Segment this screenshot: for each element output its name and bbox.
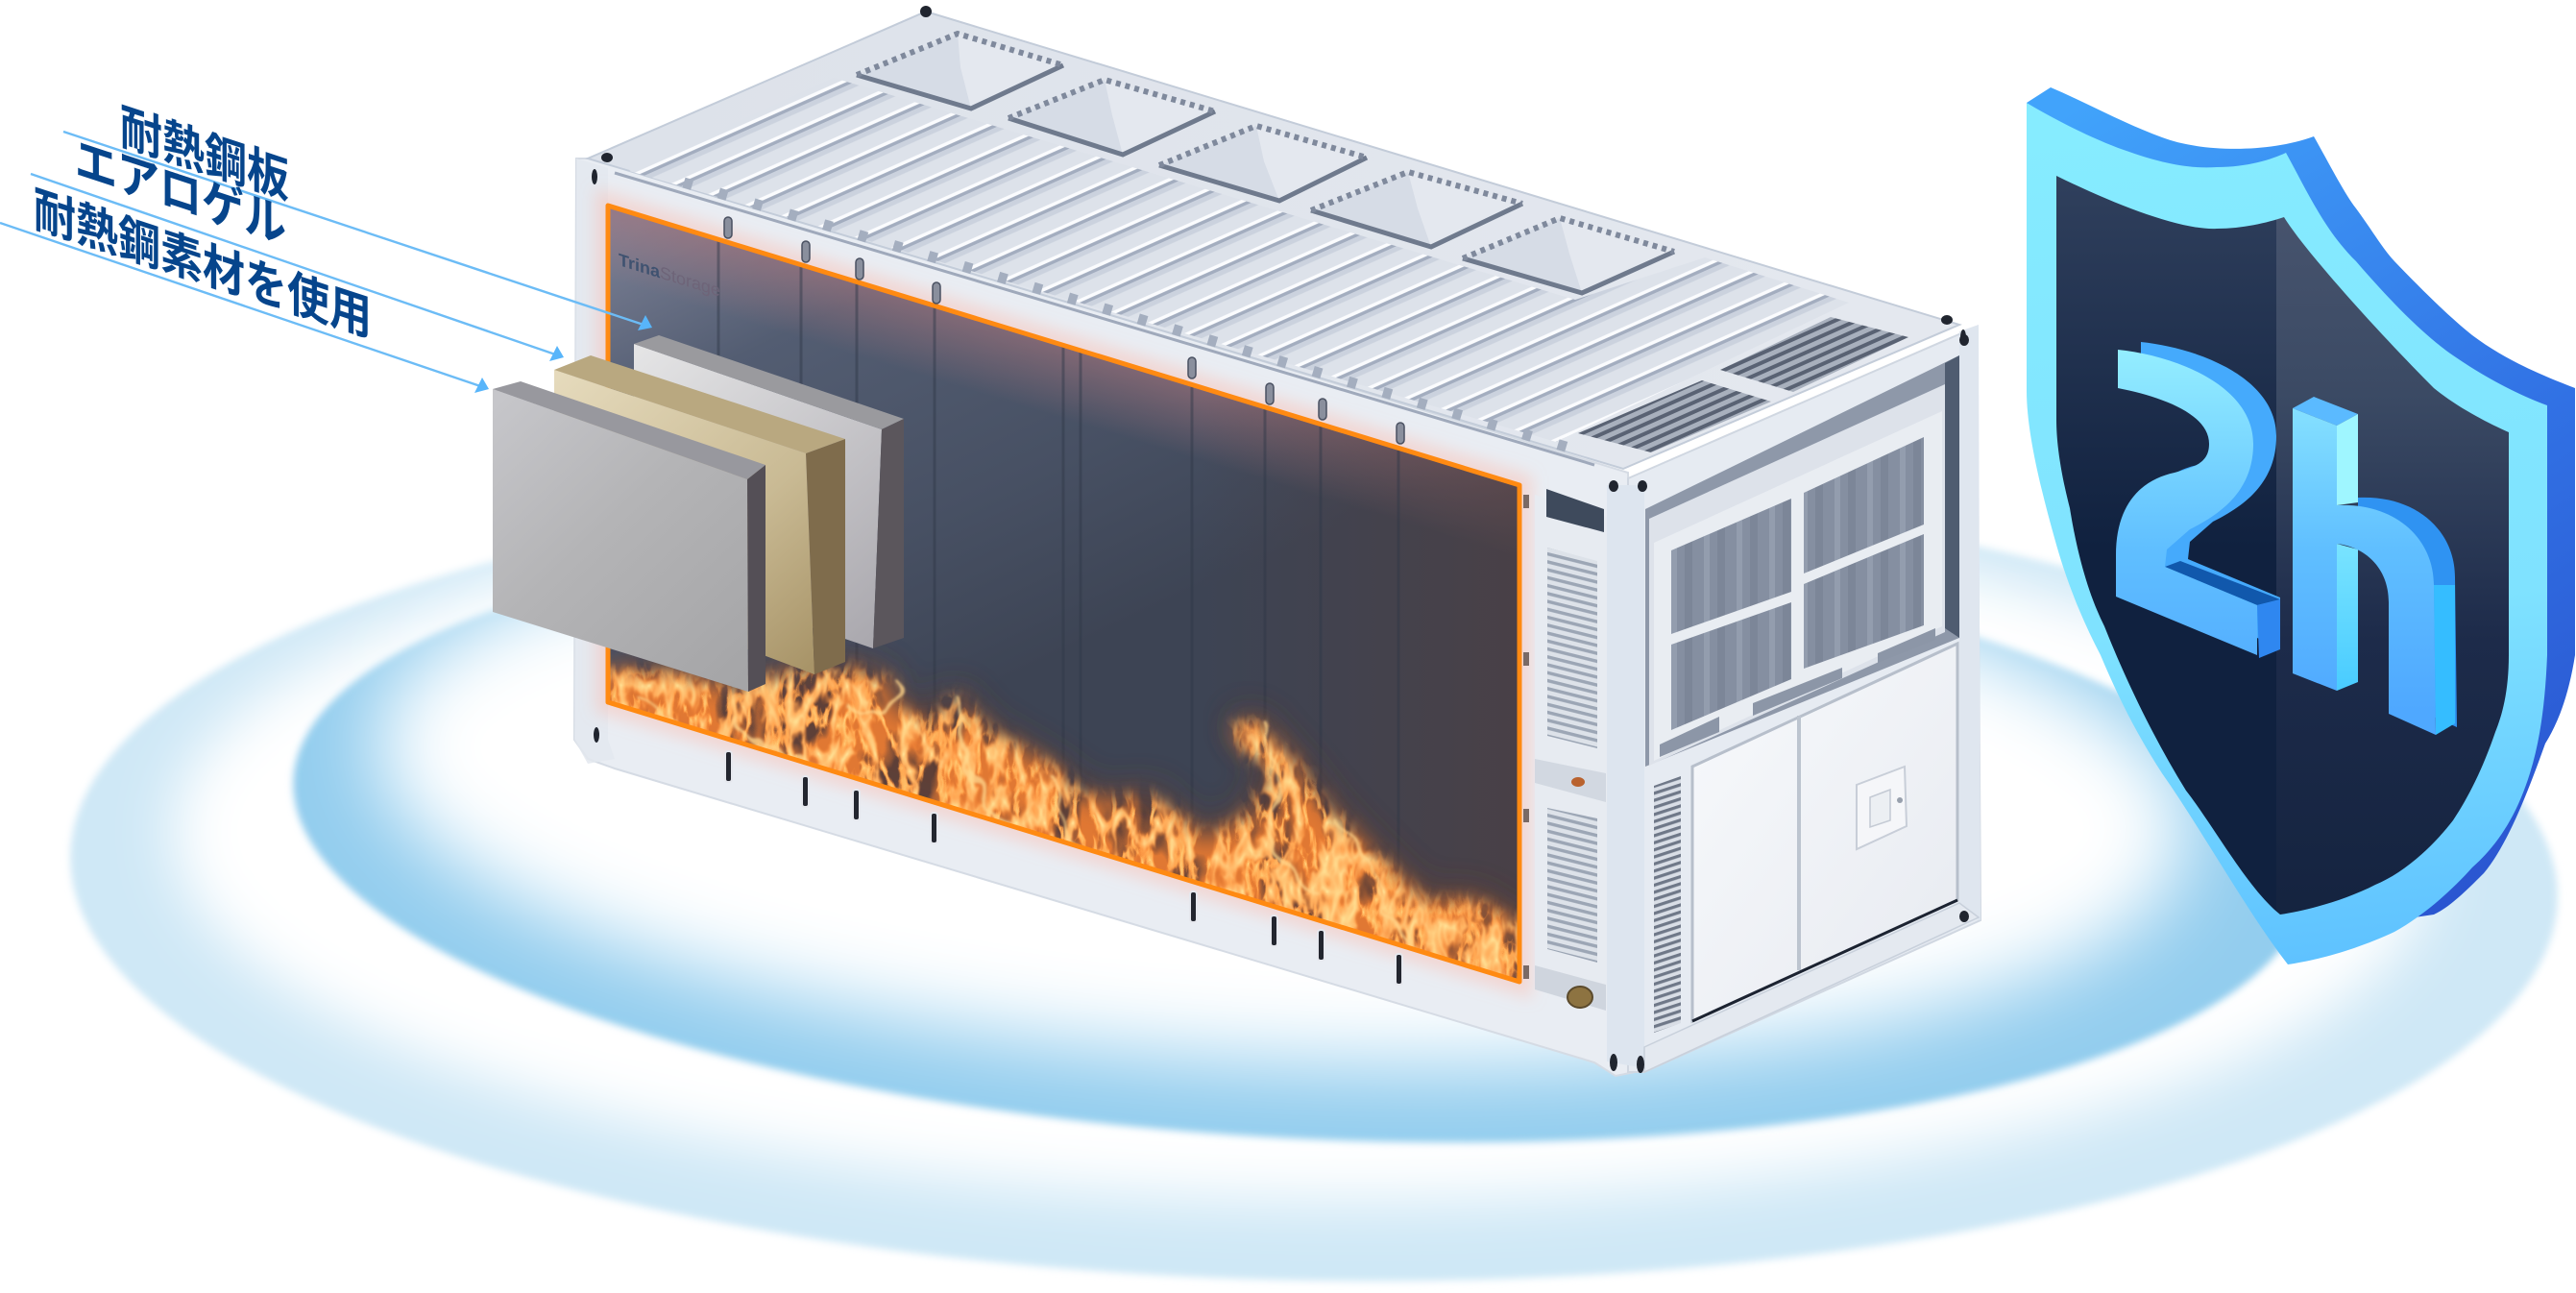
digit h stem side	[2337, 414, 2358, 505]
side louver lower	[1547, 808, 1597, 963]
panel door seams	[718, 240, 1398, 945]
shield badge	[2027, 87, 2575, 964]
fire panel top tint	[608, 206, 1519, 600]
wall layer: front steel plate	[493, 381, 766, 692]
roof edge notches	[684, 183, 1575, 450]
right recess strip	[1945, 355, 1959, 638]
leader arrow: heat-resistant steel	[0, 223, 489, 393]
window pane upper left	[1671, 499, 1791, 634]
container roof	[588, 12, 1959, 469]
window pane lower right	[1804, 534, 1924, 669]
digit h extrusion	[2358, 498, 2457, 727]
panel top hooks	[724, 217, 1404, 444]
storage container	[574, 6, 1981, 1076]
shield dark right half	[2276, 217, 2509, 915]
door gap	[1797, 716, 1801, 970]
glow around fire panel	[608, 206, 1519, 982]
leader arrow: steel plate	[63, 132, 652, 330]
bottom beam	[1644, 903, 1979, 1072]
ground glow: outer blue ring	[63, 451, 2564, 1293]
front louver	[1654, 776, 1681, 1033]
small orange connector	[1571, 777, 1585, 787]
digit h front	[2293, 408, 2436, 735]
window pane lower left	[1671, 602, 1791, 730]
digit h right side	[2434, 585, 2455, 735]
mid band	[1535, 759, 1606, 802]
dark control slot	[1546, 489, 1604, 532]
flame glow layer	[600, 670, 1527, 1009]
digit h stem top	[2293, 397, 2358, 426]
container left corner post	[574, 159, 615, 764]
logo on panel: TrinaStorage	[619, 249, 720, 301]
fire panel orange border	[608, 206, 1519, 982]
roof skylight 2	[1009, 80, 1215, 155]
lower doors	[1692, 644, 1957, 1021]
digit 2 base end	[2257, 599, 2280, 658]
digit 2 front	[2116, 350, 2257, 655]
roof front edge	[615, 173, 1594, 465]
roof vent 1	[1578, 380, 1771, 452]
label: 耐熱鋼板: 耐熱鋼板	[120, 100, 289, 209]
wall layer: rear steel plate	[634, 335, 904, 648]
roof skylight 5	[1463, 218, 1674, 293]
label: 耐熱鋼素材を使用: 耐熱鋼素材を使用	[34, 183, 372, 348]
near corner post	[1607, 485, 1644, 1068]
panel bottom hooks	[725, 751, 1402, 985]
control box	[1857, 767, 1907, 849]
roof skylight 3	[1159, 126, 1367, 201]
side louver upper	[1547, 548, 1597, 748]
door bottom shadow line	[1692, 900, 1957, 1021]
roof skylight 4	[1311, 172, 1522, 247]
bright flame licks	[639, 685, 1441, 961]
brass connector	[1567, 987, 1592, 1008]
window frame inner	[1654, 411, 1942, 761]
shield dark left half	[2046, 163, 2526, 932]
container front face	[1607, 325, 1981, 1072]
fire panel background	[608, 206, 1519, 982]
digit 2 extrusion	[2139, 342, 2280, 647]
panel side latches	[1523, 495, 1529, 979]
top beam shadow recess	[1645, 355, 1959, 767]
window bottom vents	[1660, 628, 1935, 757]
flames	[600, 660, 1527, 1009]
label: エアロゲル: エアロゲル	[75, 132, 286, 255]
container side body	[574, 159, 1644, 1076]
bottom band	[1535, 965, 1606, 1011]
fire panel right tint	[1201, 387, 1519, 982]
flame strands	[611, 663, 1518, 975]
roof vent 2	[1720, 317, 1908, 392]
flame fine strands	[600, 670, 1527, 1009]
roof corrugated ribs	[629, 78, 1849, 442]
shield front rim	[2027, 103, 2547, 964]
right corner post	[1959, 325, 1981, 920]
window pane upper right	[1804, 437, 1924, 573]
ground glow: inner blue ring	[278, 467, 2323, 1191]
leader arrow: aerogel	[31, 174, 564, 361]
digit h inner side	[2337, 544, 2358, 691]
corner castings	[592, 6, 1969, 1073]
wall layer: aerogel plate	[554, 355, 845, 674]
roof skylight 1	[857, 34, 1063, 109]
side equipment bay	[1523, 489, 1607, 1011]
digit 2 base top	[2165, 561, 2280, 605]
flame smoke layer	[610, 660, 1517, 999]
shield extruded back	[2027, 87, 2575, 922]
window frame	[1649, 384, 1945, 766]
